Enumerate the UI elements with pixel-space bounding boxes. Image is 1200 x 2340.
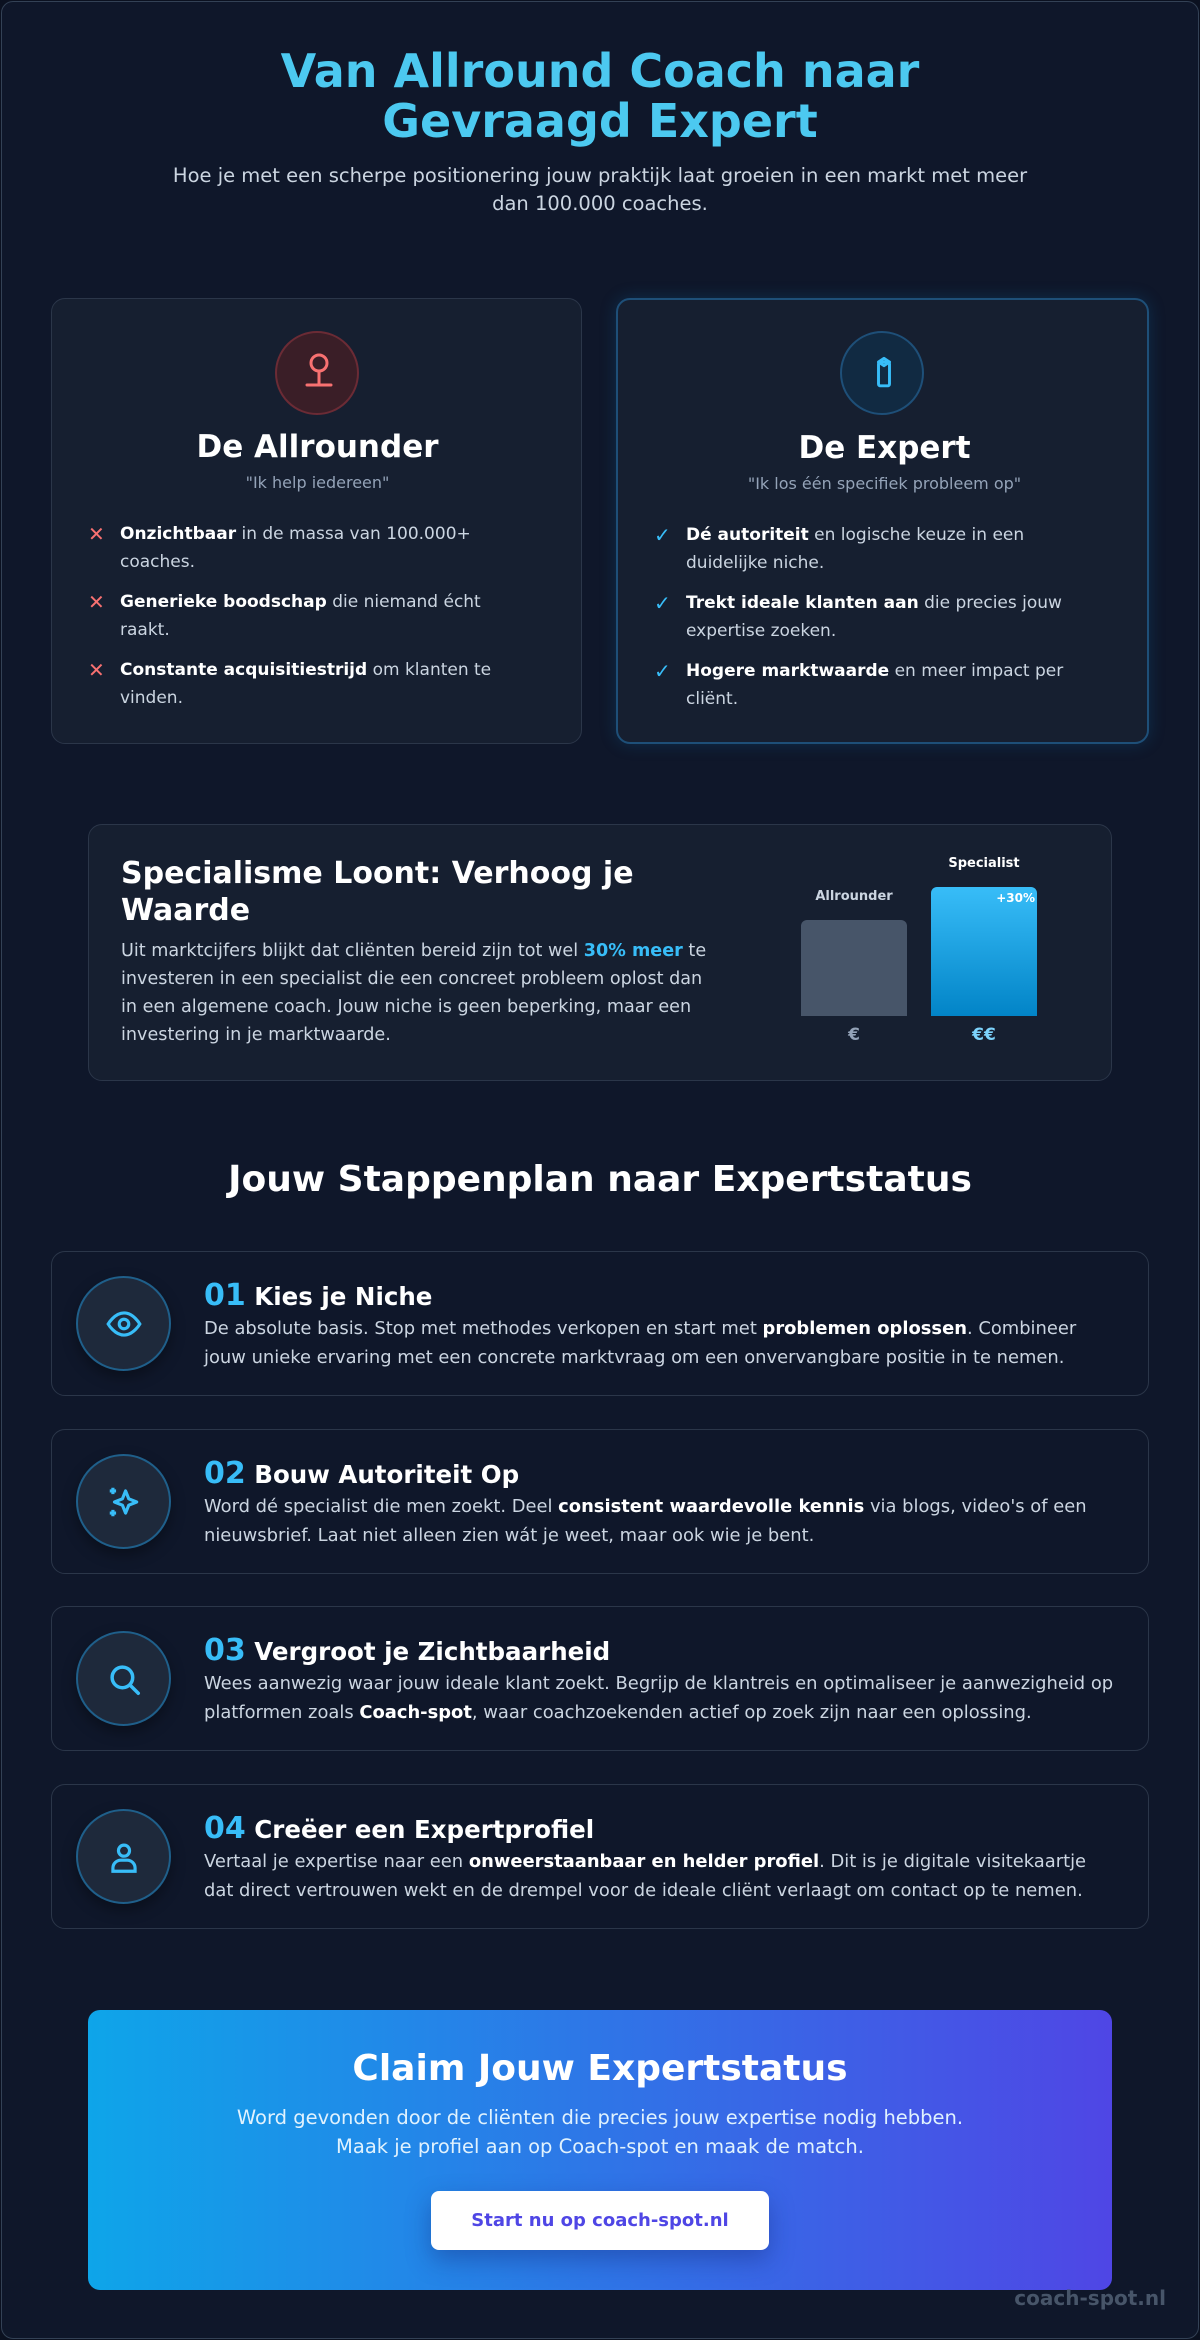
subtitle: Hoe je met een scherpe positionering jouw praktijk laat groeien in een markt met meer dan 100.000 coaches. [173,164,1027,215]
CTA text: Word gevonden door de cliënten die precies jouw expertise nodig hebben. [237,2106,963,2129]
text block: investeren in een specialist die een concreet probleem oplost dan [121,969,702,989]
heading: De Expert [798,430,971,466]
panel: allrounder: ✕ [88,522,105,546]
step 3: 03 Vergroot je Zichtbaarheid [204,1633,610,1668]
list item: Constante acquisitiestrijd om klanten te vinden. [120,660,491,708]
icon: badge [840,331,924,415]
CTA text [237,2106,963,2158]
section heading: Jouw Stappenplan naar Expertstatus [228,1159,972,1200]
step 4 [51,1784,1149,1929]
list item: Trekt ideale klanten aan die precies jouw expertise zoeken. [686,593,1062,641]
step 2: nieuwsbrief. Laat niet alleen zien wát je weet, maar ook wie je bent. [204,1525,814,1546]
panel: allrounder: ✕ [88,658,105,682]
step 3 [51,1606,1149,1751]
bar chart: €€ [972,1025,996,1045]
step 1: jouw unieke ervaring met een concrete marktvraag om een onvervangbare positie in te nemen. [204,1347,1064,1368]
panel: expert [616,298,1149,744]
list item: Hogere marktwaarde en meer impact per cliënt. [686,661,1063,709]
text block: Uit marktcijfers blijkt dat cliënten bereid zijn tot wel 30% meer te [121,941,706,961]
step 2: 02 Bouw Autoriteit Op [204,1456,519,1491]
CTA text: Maak je profiel aan op Coach-spot en maak de match. [336,2135,864,2158]
button [431,2191,769,2250]
bar chart: Allrounder [815,889,893,904]
icon: search [76,1631,171,1726]
step 4: 04 Creëer een Expertprofiel [204,1811,594,1846]
panel: specialisme loont [88,824,1112,1081]
heading: De Allrounder [196,429,439,465]
panel: allrounder: ✕ [88,590,105,614]
footer brand: coach-spot.nl [1014,2286,1166,2310]
bar chart: € [848,1025,860,1045]
text block [121,941,706,1045]
step 1: 01 Kies je Niche [204,1278,432,1313]
panel: expert: ✓ [654,591,671,615]
title: Van Allround Coach naar [281,44,919,98]
step 4: Vertaal je expertise naar een onweerstaanbaar en helder profiel. Dit is je digitale visitekaartje [204,1851,1086,1872]
step 1 [51,1251,1149,1396]
quote: "Ik help iedereen" [246,473,389,492]
step 1: De absolute basis. Stop met methodes verkopen en start met problemen oplossen. Combineer [204,1318,1076,1339]
bar chart: Specialist [948,856,1020,871]
icon: user [76,1809,171,1904]
icon: sparkles [76,1454,171,1549]
bar chart [801,856,1037,1045]
title [280,44,920,148]
callout: CTA [88,2010,1112,2290]
step 2 [51,1429,1149,1574]
step 2: Word dé specialist die men zoekt. Deel consistent waardevolle kennis via blogs, video's of een [204,1496,1087,1517]
step 3: platformen zoals Coach-spot, waar coachzoekenden actief op zoek zijn naar een oplossing. [204,1702,1032,1723]
heading: Specialisme Loont: Verhoog je Waarde [121,856,634,928]
panel: expert: ✓ [654,523,671,547]
button: Start nu op coach-spot.nl [471,2210,729,2231]
quote: "Ik los één specifiek probleem op" [748,474,1021,493]
icon: eye [76,1276,171,1371]
panel: allrounder [51,298,582,744]
step 3: Wees aanwezig waar jouw ideale klant zoekt. Begrijp de klantreis en optimaliseer je aanwezigheid op [204,1673,1113,1694]
CTA heading: Claim Jouw Expertstatus [352,2048,848,2089]
text block: in een algemene coach. Jouw niche is geen beperking, maar een [121,997,691,1017]
panel: expert: ✓ [654,659,671,683]
step 4: dat direct vertrouwen wekt en de drempel voor de ideale cliënt verlaagt om contact op te nemen. [204,1880,1083,1901]
list item: Onzichtbaar in de massa van 100.000+ coaches. [120,524,471,572]
title: Gevraagd Expert [382,94,818,148]
list item: Dé autoriteit en logische keuze in een duidelijke niche. [686,525,1024,573]
icon: pin [275,331,359,415]
text block: investering in je marktwaarde. [121,1025,391,1045]
bar chart: +30% [996,891,1035,905]
list item: Generieke boodschap die niemand écht raakt. [120,592,481,640]
